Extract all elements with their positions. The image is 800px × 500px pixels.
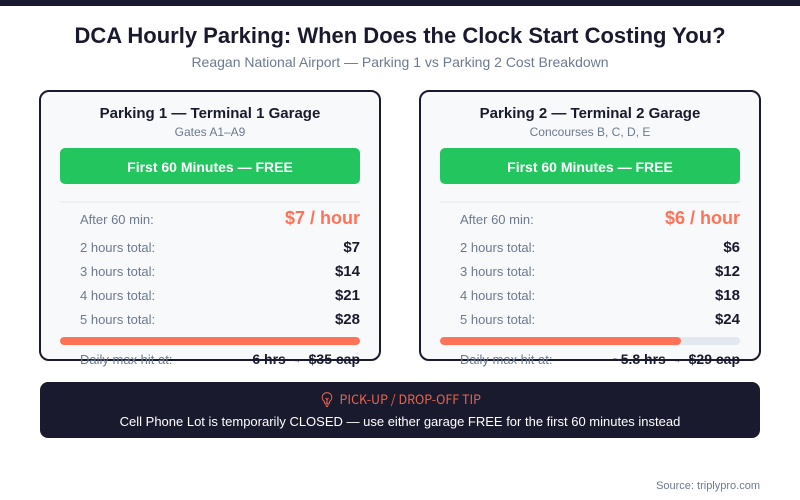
hourly rate row: After 60 min: — [460, 212, 534, 227]
daily max row: ~5.8 hrs $29 cap — [613, 351, 740, 367]
top bar — [0, 0, 800, 6]
4 hours total — [460, 287, 740, 304]
panel: Parking 1 — [39, 90, 381, 361]
hourly rate row: After 60 min: — [80, 212, 154, 227]
daily max row: → — [294, 358, 301, 365]
panel heading: Parking 2: Parking 2 — Terminal 2 Garage — [480, 105, 700, 122]
2 hours total — [460, 239, 740, 256]
free period banner: First 60 Minutes — FREE — [507, 159, 673, 175]
title: DCA Hourly Parking: When Does the Clock Start Costing You? — [74, 23, 726, 48]
4 hours total — [80, 287, 360, 304]
free period banner — [60, 148, 360, 184]
4 hours total: 4 hours total: — [460, 288, 535, 303]
2 hours total: $6 — [723, 239, 740, 256]
5 hours total: $24 — [715, 311, 740, 328]
2 hours total: 2 hours total: — [80, 240, 155, 255]
free period banner: First 60 Minutes — FREE — [127, 159, 293, 175]
5 hours total: 5 hours total: — [460, 312, 535, 327]
2 hours total — [80, 239, 360, 256]
hourly rate row — [80, 208, 360, 228]
free period banner — [440, 148, 740, 184]
daily max row: → — [674, 358, 681, 365]
subtitle: Reagan National Airport — Parking 1 vs Parking 2 Cost Breakdown — [191, 54, 609, 70]
hourly rate row — [460, 208, 740, 228]
daily max row: 6 hrs $35 cap — [252, 351, 360, 367]
daily max row: Daily max hit at: — [460, 352, 552, 367]
hourly rate row: $7 / hour — [285, 208, 360, 228]
panel heading: Parking 1: Parking 1 — Terminal 1 Garage — [100, 105, 320, 122]
3 hours total: $14 — [335, 263, 360, 280]
5 hours total: $28 — [335, 311, 360, 328]
gates: Parking 1: Gates A1–A9 — [175, 125, 245, 139]
daily max row — [460, 351, 740, 367]
4 hours total: 4 hours total: — [80, 288, 155, 303]
3 hours total: 3 hours total: — [80, 264, 155, 279]
3 hours total — [460, 263, 740, 280]
2 hours total: 2 hours total: — [460, 240, 535, 255]
3 hours total: $12 — [715, 263, 740, 280]
progress bar: about 80 percent — [440, 337, 740, 345]
hourly rate row: $6 / hour — [665, 208, 740, 228]
3 hours total: 3 hours total: — [460, 264, 535, 279]
2 hours total: $7 — [343, 239, 360, 256]
3 hours total — [80, 263, 360, 280]
daily max row: Daily max hit at: — [80, 352, 172, 367]
tip label: PICK-UP / DROP-OFF TIP — [340, 389, 481, 408]
5 hours total: 5 hours total: — [80, 312, 155, 327]
source note: Source: triplypro.com — [656, 480, 760, 492]
gates: Parking 2: Concourses B, C, D, E — [530, 125, 650, 139]
5 hours total — [80, 311, 360, 328]
panel: Parking 2 — [419, 90, 761, 361]
icon: light bulb — [322, 392, 332, 407]
4 hours total: $21 — [335, 287, 360, 304]
daily max row — [80, 351, 360, 367]
callout: pick-up tip — [40, 382, 760, 438]
4 hours total: $18 — [715, 287, 740, 304]
progress bar: full — [60, 337, 360, 345]
5 hours total — [460, 311, 740, 328]
tip text: Cell Phone Lot is temporarily CLOSED — use either garage FREE for the first 60 minutes instead — [120, 414, 680, 429]
